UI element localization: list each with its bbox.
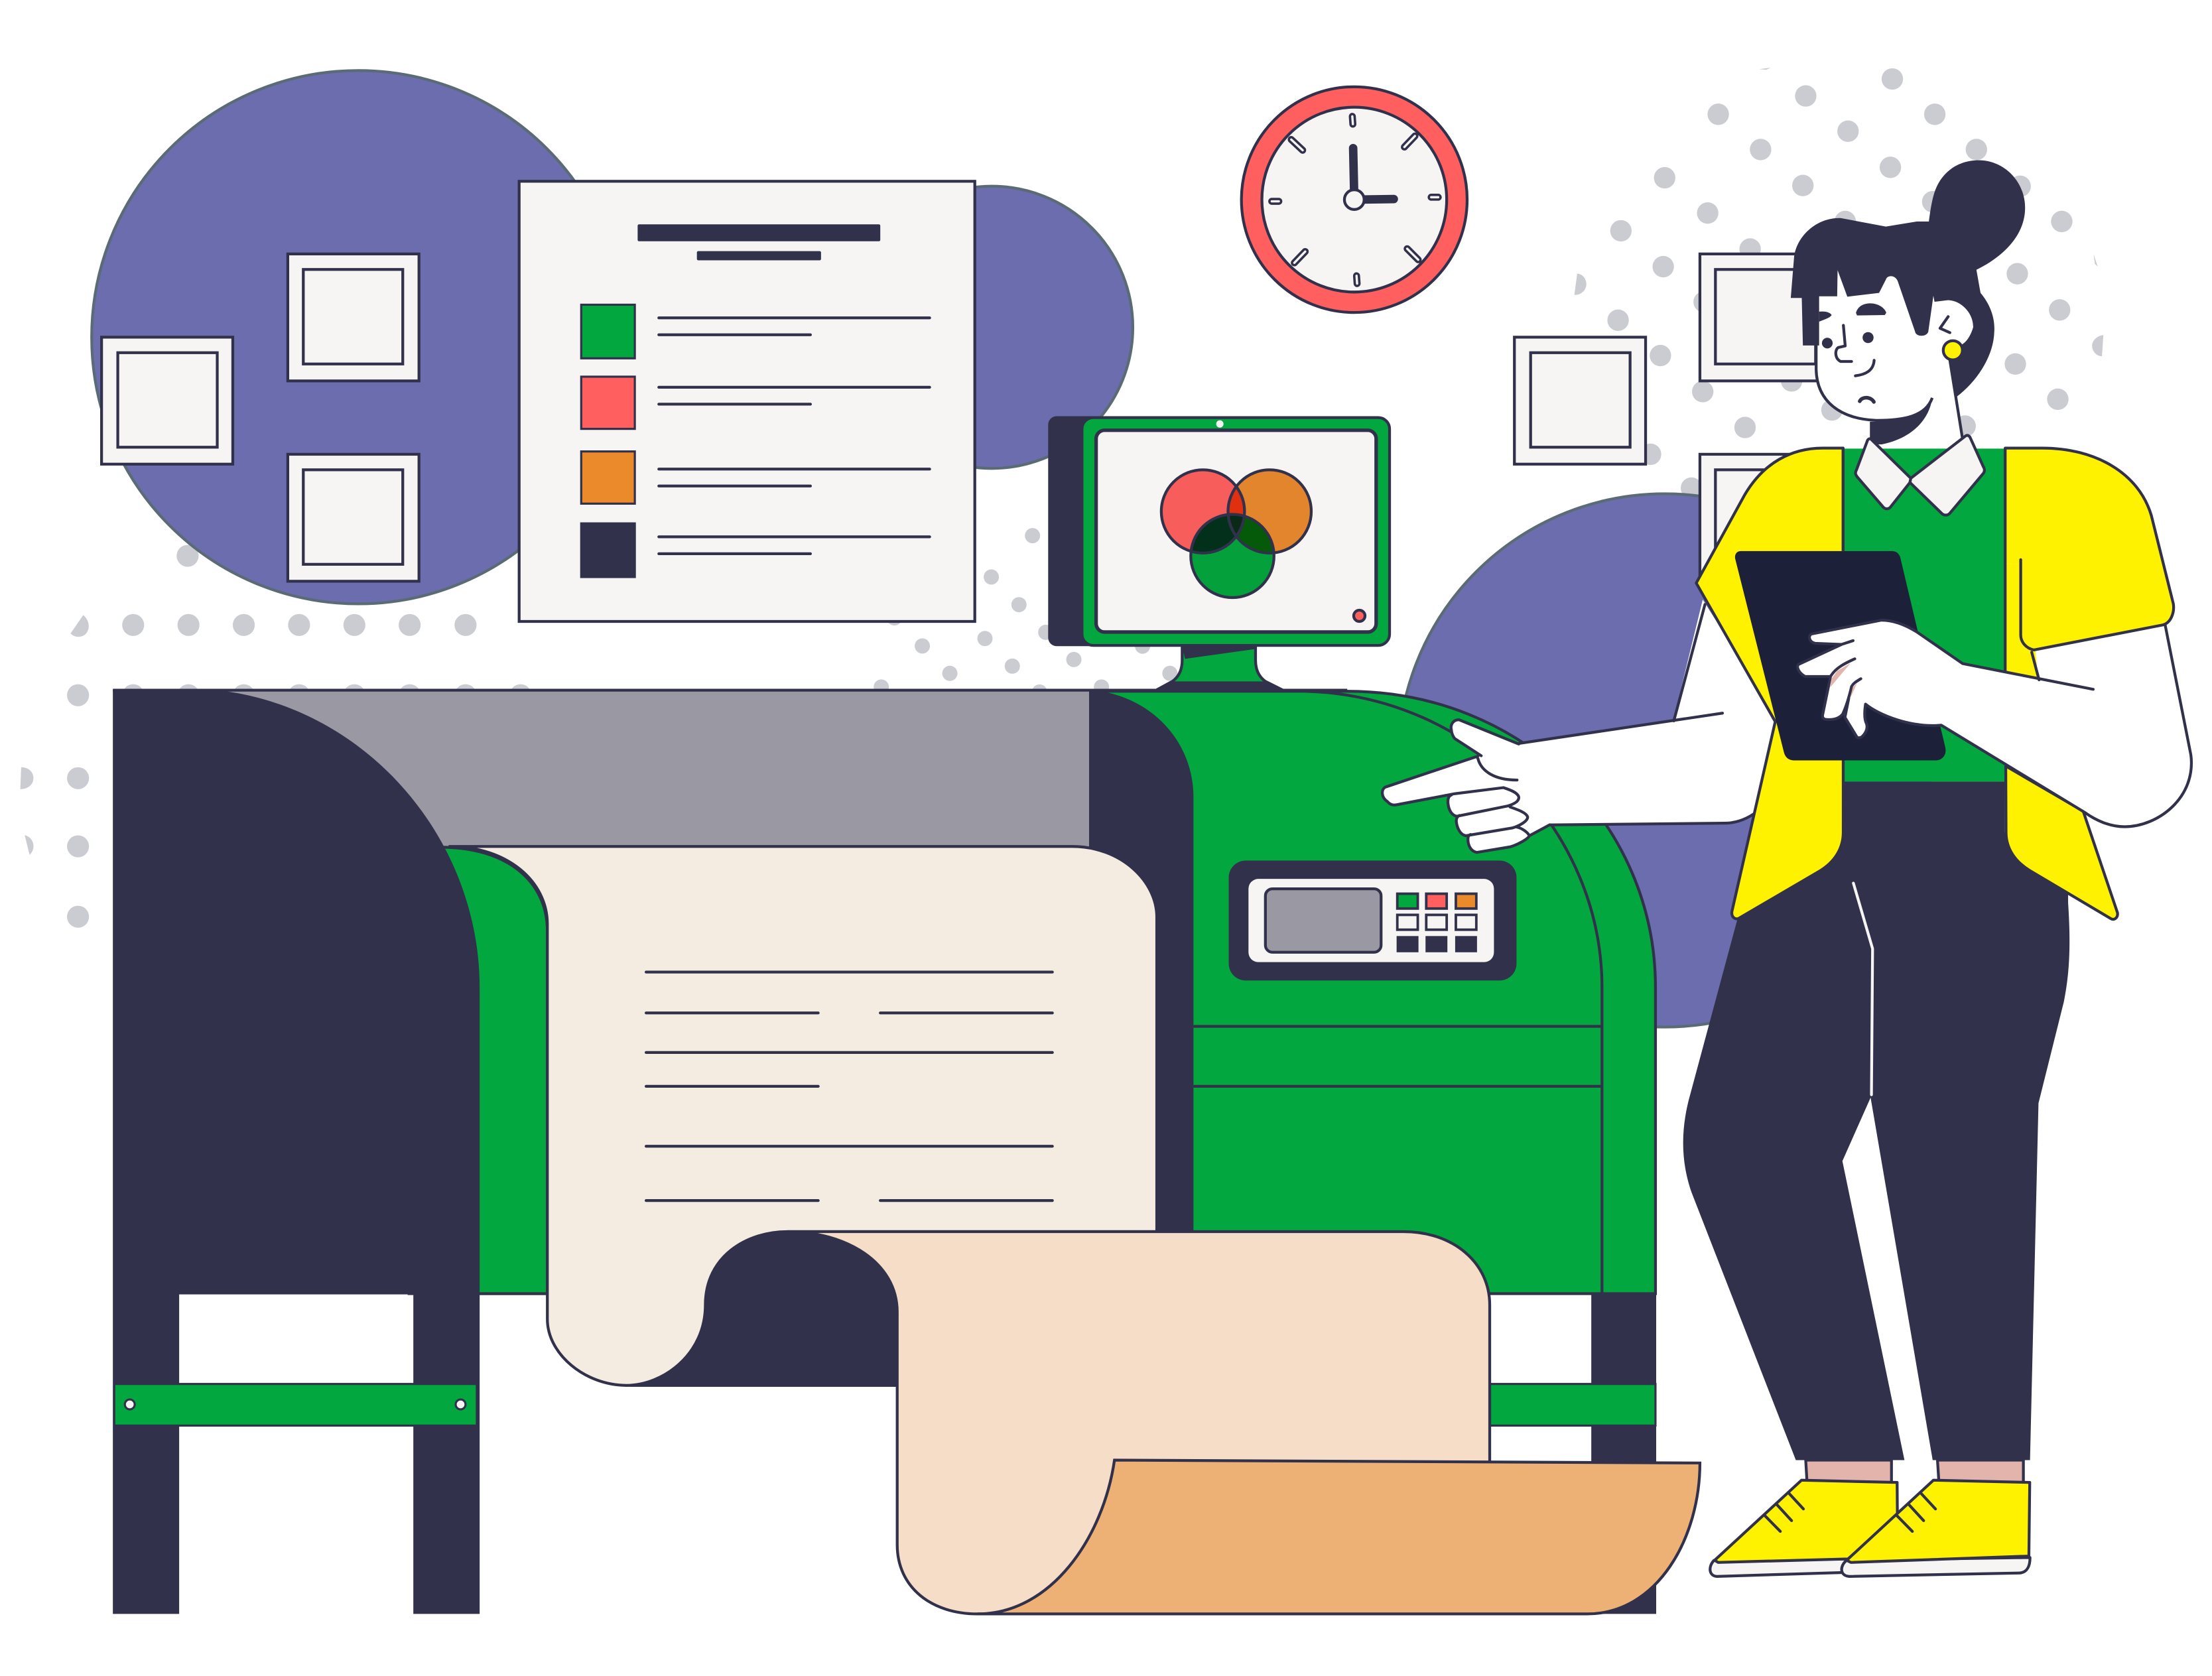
person: shirt — [1844, 448, 2006, 781]
person: right arm and hand holding tablet — [1797, 620, 2191, 826]
panel: colour legend document — [519, 181, 975, 621]
paper: curled orange end — [978, 1460, 1700, 1614]
printer: dark feed slot — [649, 1228, 903, 1387]
person: left shoe — [1710, 1480, 1898, 1577]
picture frames: right cluster — [1514, 254, 1831, 581]
printer: grey paper tray — [212, 691, 1093, 848]
person: trouser seam — [1853, 883, 1872, 1095]
printer: control panel — [1229, 861, 1516, 980]
person: her back hair — [1933, 268, 1994, 397]
person: ankles — [1805, 1460, 2024, 1484]
person: sleeve outline — [1843, 448, 2174, 680]
paper: second sheet — [787, 1232, 1490, 1614]
person: right shoe — [1842, 1480, 2030, 1577]
person: jacket left panel — [1696, 448, 1843, 919]
person: tablet — [1735, 551, 1945, 761]
purple circle: behind person — [1398, 493, 1931, 1027]
person: jacket right lower panel — [2006, 766, 2118, 919]
icon: wall clock — [1242, 87, 1467, 312]
person: trousers — [1683, 781, 2069, 1460]
printer: green body — [480, 691, 1656, 1294]
printer: left green cross bar — [114, 1384, 477, 1425]
purple circle: behind document — [851, 186, 1133, 468]
person: neck shadow — [1871, 398, 1932, 444]
paper: first printed sheet — [448, 846, 1157, 1386]
printer: dark curl under sheet — [626, 1232, 897, 1387]
printer: dark side panel with legs — [113, 690, 480, 1614]
monitor with overlapping colour circles — [1048, 416, 1390, 646]
background dots: right group — [1575, 68, 2103, 499]
person: pointing hand — [1382, 720, 1550, 852]
icon: venn diagram of colours — [1161, 470, 1311, 598]
person: front hair and bun — [1791, 161, 2025, 346]
background dots: middle group — [874, 528, 1177, 700]
printer: green inner roller — [409, 847, 547, 1294]
person: jacket right shoulder and sleeve — [2006, 448, 2174, 650]
picture frames: left cluster — [101, 254, 419, 581]
person: collar — [1856, 435, 1984, 515]
person: extended arm — [1518, 600, 1780, 825]
printer: right green cross bar — [1481, 1384, 1656, 1425]
printer: right leg — [1591, 1294, 1656, 1614]
printer: dark inner cover — [1089, 690, 1193, 1242]
person: face features — [1819, 303, 1950, 402]
person: face outline — [1816, 339, 1963, 440]
printer: top edge line — [113, 690, 1347, 691]
monitor stand — [1157, 645, 1282, 690]
person: neck and head — [1816, 289, 1973, 448]
purple circle: top left — [92, 70, 625, 604]
icon: earring — [1943, 341, 1963, 360]
person: jacket strip under sleeve — [2006, 564, 2038, 680]
background dots: left group — [21, 545, 531, 928]
